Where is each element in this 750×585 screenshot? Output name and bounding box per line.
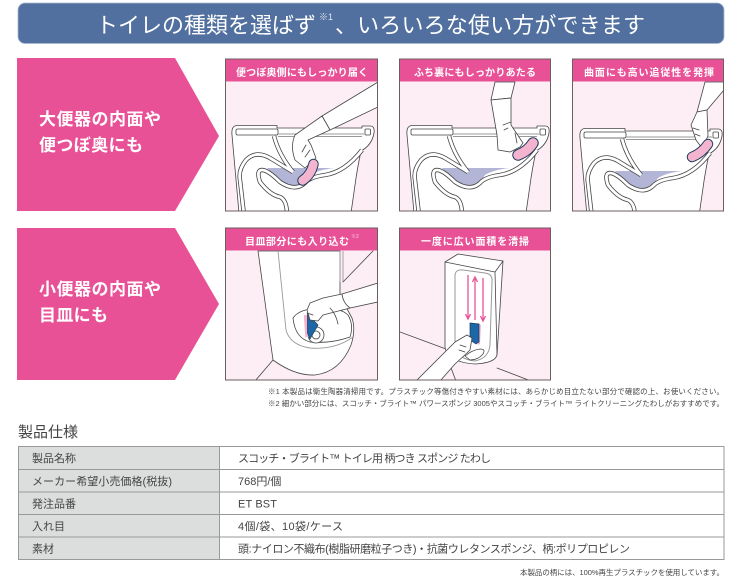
spec table: 素材 xyxy=(32,542,54,556)
illustration: urinal with hand and sponge xyxy=(255,251,378,381)
illustration: toilet with hand and sponge xyxy=(232,82,378,215)
spec table: 製品名称 xyxy=(32,451,76,465)
panel heading: 便つぼ奥側にもしっかり届く xyxy=(236,66,368,79)
panel heading: ※2 xyxy=(351,234,359,240)
footnotes xyxy=(268,386,724,408)
panel: reaches the back of the bowl xyxy=(226,59,378,215)
panel heading xyxy=(573,60,723,82)
panel heading xyxy=(400,60,550,82)
panel heading: ふち裏にもしっかりあたる xyxy=(414,66,536,79)
panel heading: 目皿部分にも入り込む xyxy=(245,235,349,248)
panel heading xyxy=(226,60,377,82)
arrow panel: urinals: 目皿にも xyxy=(39,306,108,325)
illustration: urinal with hand, sponge and arrows xyxy=(400,254,531,381)
spec table: 頭:ナイロン不織布(樹脂研磨粒子つき)・抗菌ウレタンスポンジ、柄:ポリプロピレン xyxy=(238,542,630,556)
panel: follows curved surfaces xyxy=(572,59,724,218)
arrows xyxy=(466,275,486,321)
spec table: ET BST xyxy=(238,498,277,510)
panel heading: 曲面にも高い追従性を発揮 xyxy=(584,66,714,79)
arrow panel: urinals xyxy=(17,228,219,380)
illustration: toilet with hand and sponge xyxy=(407,82,549,215)
arrow panel: toilets: 大便器の内面や xyxy=(39,110,161,129)
footnotes: ※1 本製品は衛生陶器清掃用です。プラスチック等傷付きやすい素材には、あらかじめ目立たない部分で確認の上、お使いください。 xyxy=(268,386,724,396)
spec table: 発注品番 xyxy=(32,496,76,510)
spec table: スコッチ・ブライト™ トイレ用 柄つき スポンジ たわし xyxy=(238,451,491,465)
footnotes: ※2 細かい部分には、スコッチ・ブライト™ パワースポンジ 3005やスコッチ・ブライト™ ライトクリーニングたわしがおすすめです。 xyxy=(268,398,724,408)
title banner: 、いろいろな使い方ができます xyxy=(335,13,645,38)
heading: product specs: 製品仕様 xyxy=(18,424,78,441)
illustration: toilet with hand and sponge xyxy=(580,82,724,218)
title banner: トイレの種類を選ばず xyxy=(96,13,316,38)
title banner: ※1 xyxy=(319,12,333,22)
panel heading xyxy=(400,228,550,250)
arrow panel: urinals: 小便器の内面や xyxy=(39,280,161,299)
panel: reaches under the rim xyxy=(400,59,550,215)
panel: cleans wide area at once xyxy=(400,228,550,381)
title banner xyxy=(18,3,724,44)
panel: reaches drain grate xyxy=(226,228,378,381)
spec table xyxy=(18,446,724,560)
panel heading xyxy=(226,228,377,250)
spec table: 768円/個 xyxy=(238,475,281,488)
spec table: 入れ目 xyxy=(32,520,65,533)
table footnote: 本製品の柄には、100%再生プラスチックを使用しています。 xyxy=(520,567,724,577)
panel heading: 一度に広い面積を清掃 xyxy=(421,235,529,248)
arrow panel: toilets xyxy=(17,58,219,211)
spec table: 4個/袋、10袋/ケース xyxy=(238,519,343,533)
spec table: メーカー希望小売価格(税抜) xyxy=(32,474,172,488)
arrow panel: toilets: 便つぼ奥にも xyxy=(39,136,143,155)
